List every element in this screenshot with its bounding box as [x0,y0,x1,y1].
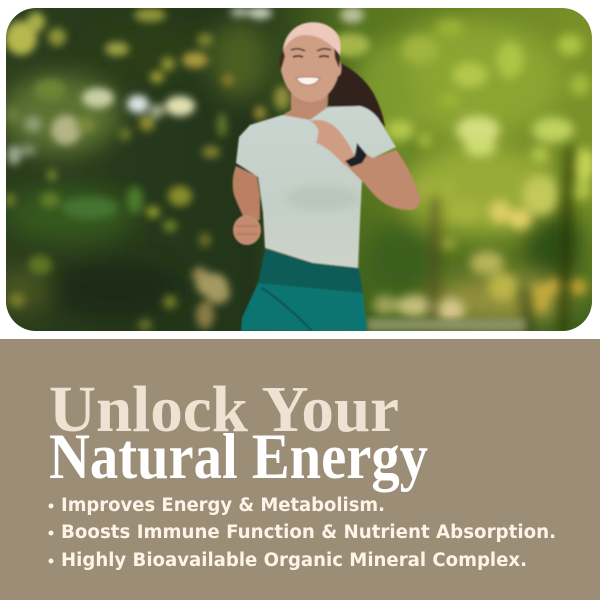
smartwatch [345,143,367,167]
smile [296,77,320,85]
neck [282,92,329,121]
hair edge [280,46,340,70]
runner [233,22,420,331]
far arm and fist [233,166,260,222]
blurred forest background [0,7,595,331]
bullet: energy: Improves Energy & Metabolism. [61,495,385,516]
bullet: immune: Boosts Immune Function & Nutrient Absorption. [61,522,556,543]
cap [283,22,341,55]
tree trunks [432,150,570,331]
shirt [236,106,396,268]
panel: text background [0,339,600,600]
face [281,31,341,102]
ground path [367,319,525,331]
ponytail [328,62,385,128]
photo: runner in a sunlit forest [0,7,595,331]
bullet: minerals: Highly Bioavailable Organic Mineral Complex. [61,550,527,571]
eyebrows and eyes [291,49,331,51]
heading: Unlock Your: Unlock Your [49,373,399,446]
near arm [345,150,420,210]
leggings [241,283,367,331]
raised hand [310,120,355,166]
shirt shading [289,187,355,210]
benefit bullet list [48,495,556,571]
waistband [258,249,363,293]
heading: Natural Energy: Natural Energy [49,421,428,493]
